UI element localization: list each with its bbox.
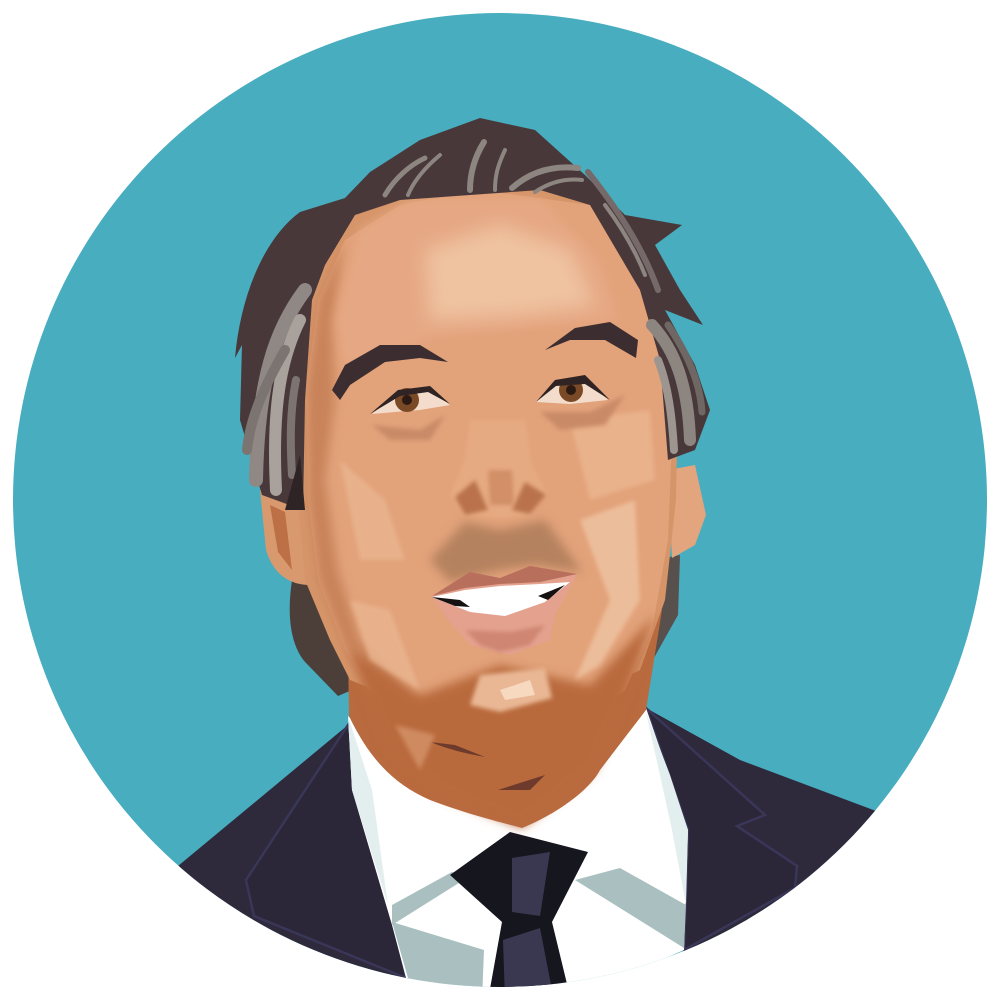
right eyebrow [545,322,638,358]
mouth [432,566,577,655]
necktie [450,832,588,1000]
ears [260,465,706,585]
collar edge highlights [348,712,688,905]
forehead light [338,200,618,365]
face base [306,190,672,735]
left eyebrow [332,345,448,400]
hair [235,118,710,510]
white shirt [348,708,688,1000]
right eye [536,375,625,430]
grey streaks right [588,172,702,450]
suit jacket [178,708,876,1000]
left eye [370,386,450,440]
jowl and chin shading [350,615,655,828]
right lapel [646,708,797,950]
back hair lower [290,580,370,696]
cheek highlights [340,460,420,690]
grey streaks left [247,290,305,490]
skin underlay [298,180,678,740]
shirt collar shadow [392,868,686,1000]
nose [450,420,548,518]
grey streaks top [385,142,582,195]
face side shadow [306,240,420,716]
left lapel [246,725,406,978]
hair main mass [235,118,710,510]
stubble upper lip [430,520,582,582]
suit and shirt [178,708,876,1000]
neck [348,610,662,828]
